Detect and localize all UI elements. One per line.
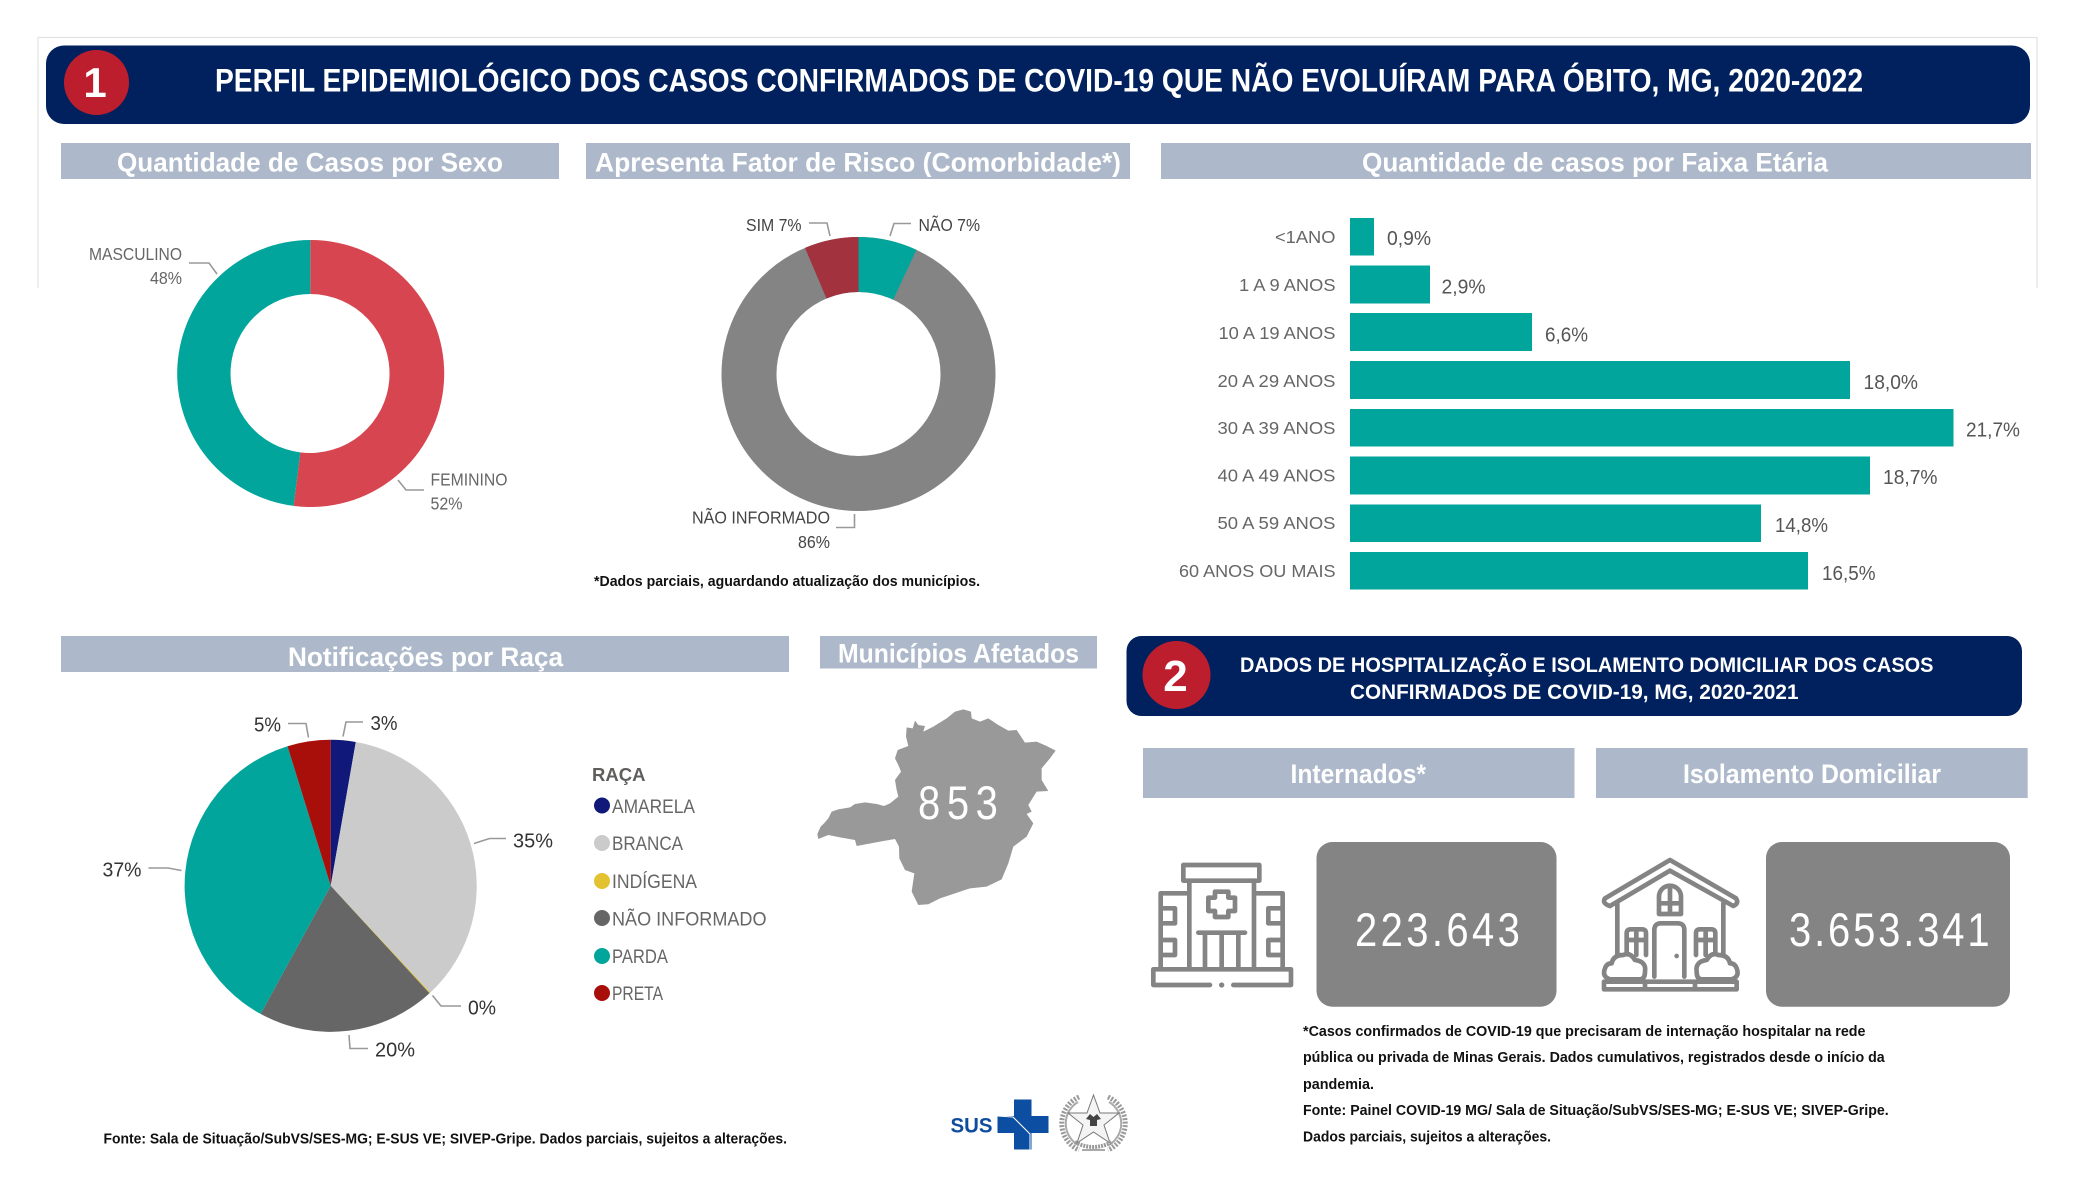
heading: isolamento	[1596, 748, 2028, 798]
label: 37%: 37%	[102, 860, 142, 882]
bar: 50 a 59 anos	[1218, 504, 1828, 542]
panel: internados	[1143, 748, 1574, 1007]
label: sim: SIM 7%	[746, 215, 802, 235]
heading: isolamento: Isolamento Domiciliar	[1683, 759, 1941, 789]
label: 20%: 20%	[375, 1040, 415, 1062]
heading: internados: Internados*	[1290, 759, 1426, 789]
badge: number 2	[1142, 641, 1210, 709]
footnote: internação e fonte: pandemia.	[1303, 1077, 1374, 1093]
bar: 40 a 49 anos: 18,7%	[1883, 467, 1938, 489]
subtitle text: CONFIRMADOS DE COVID-19, MG, 2020-2021	[1350, 680, 1799, 704]
bar: 20 a 29 anos: 18,0%	[1864, 372, 1918, 394]
bar: 40 a 49 anos	[1218, 456, 1938, 494]
label: sim	[746, 215, 830, 236]
label: masculino: 48%	[150, 268, 182, 288]
bar: 1 a 9 anos	[1239, 266, 1486, 304]
icon: house	[1604, 860, 1738, 989]
stat card: 3.653.341: 3.653.341	[1789, 905, 1990, 957]
heading: faixa etária	[1161, 143, 2031, 179]
bar: 20 a 29 anos	[1218, 361, 1918, 399]
label: masculino	[89, 244, 217, 288]
legend: raça: NÃO INFORMADO	[612, 908, 766, 930]
legend: raça: BRANCA	[612, 834, 683, 855]
bar: 1 a 9 anos: 2,9%	[1442, 276, 1486, 298]
heading: comorbidade: Apresenta Fator de Risco (Comorbidade*)	[595, 148, 1121, 178]
badge: number 2: 2	[1163, 652, 1188, 701]
label: 35%: 35%	[513, 830, 553, 852]
bar chart: faixa etária	[1179, 218, 2020, 590]
bar: 60 anos ou mais: 60 ANOS OU MAIS	[1179, 561, 1336, 581]
label: não: NÃO 7%	[918, 214, 980, 235]
footnote: internação e fonte: pública ou privada de Minas Gerais. Dados cumulativos, registrados desde o início da	[1303, 1050, 1886, 1066]
title text: PERFIL EPIDEMIOLÓGICO DOS CASOS CONFIRMADOS DE COVID-19 QUE NÃO EVOLUÍRAM PARA ÓBITO, MG, 2020-2022	[215, 62, 1863, 98]
label: não informado: 86%	[798, 532, 830, 552]
bar: 30 a 39 anos	[1218, 409, 2020, 446]
legend: raça: AMARELA	[612, 797, 695, 818]
heading: internados	[1143, 748, 1574, 798]
stat card: 223.643: 223.643	[1355, 905, 1520, 957]
logo: SUS	[950, 1100, 1048, 1150]
bar: 20 a 29 anos: 20 A 29 ANOS	[1218, 371, 1336, 391]
legend: raça: RAÇA	[592, 764, 645, 785]
panel: age bands	[1161, 143, 2031, 590]
heading: sexo: Quantidade de Casos por Sexo	[117, 148, 503, 178]
footnote: dados parciais: *Dados parciais, aguardando atualização dos municípios.	[594, 574, 980, 590]
bar: 50 a 59 anos: 50 A 59 ANOS	[1218, 513, 1336, 533]
label: 3%: 3%	[370, 713, 398, 735]
heading: sexo	[61, 143, 559, 179]
legend: raça: PARDA	[612, 947, 668, 968]
heading: municípios: Municípios Afetados	[838, 638, 1079, 668]
bar: 60 anos ou mais: 16,5%	[1822, 563, 1876, 585]
bar: 10 a 19 anos: 10 A 19 ANOS	[1218, 323, 1336, 343]
banner 1: main title	[46, 46, 2030, 124]
bar: 10 a 19 anos	[1218, 313, 1588, 351]
panel: affected municipalities	[817, 636, 1097, 905]
bar: 50 a 59 anos: 14,8%	[1775, 515, 1828, 537]
label: feminino: 52%	[430, 494, 462, 514]
bar: 30 a 39 anos: 21,7%	[1966, 420, 2020, 442]
bar: 60 anos ou mais	[1179, 552, 1876, 590]
heading: faixa etária: Quantidade de casos por Faixa Etária	[1362, 148, 1829, 178]
label: masculino: MASCULINO	[89, 244, 182, 264]
heading: raça	[61, 636, 789, 672]
label: não informado: NÃO INFORMADO	[692, 506, 830, 528]
source note: left: Fonte: Sala de Situação/SubVS/SES-MG; E-SUS VE; SIVEP-Gripe. Dados parciais, sujeitos a alterações.	[104, 1132, 787, 1148]
bar: 1 a 9 anos: 1 A 9 ANOS	[1239, 275, 1336, 295]
panel: comorbidity	[586, 143, 1130, 590]
logo: brasão de Minas Gerais	[1062, 1095, 1125, 1150]
bar: 30 a 39 anos: 30 A 39 ANOS	[1218, 418, 1336, 438]
bar: 10 a 19 anos: 6,6%	[1545, 324, 1588, 346]
donut chart: comorbidade	[749, 237, 968, 484]
label: não informado	[692, 506, 854, 552]
label: feminino: FEMININO	[430, 470, 508, 490]
subtitle text: DADOS DE HOSPITALIZAÇÃO E ISOLAMENTO DOMICILIAR DOS CASOS	[1240, 652, 1934, 677]
heading: raça: Notificações por Raça	[288, 642, 564, 672]
label: 5%: 5%	[254, 714, 281, 736]
footnote: internação e fonte: *Casos confirmados de COVID-19 que precisaram de internação hospitalar na rede	[1303, 1024, 1866, 1040]
stat card: 3.653.341	[1766, 842, 2010, 1007]
label: 0%	[432, 996, 496, 1020]
number: 853: 853	[918, 778, 998, 830]
bar: menor de 1 ano	[1275, 218, 1431, 256]
map: Minas Gerais	[817, 709, 1056, 905]
pie chart: raça	[185, 740, 477, 1032]
legend: raça	[592, 764, 766, 1005]
footnote: internação e fonte	[1303, 1024, 1889, 1146]
legend: raça: PRETA	[612, 984, 663, 1005]
label: 5%	[254, 714, 308, 738]
logo: SUS: SUS	[950, 1114, 992, 1138]
label: 35%	[474, 830, 553, 852]
label: não	[890, 214, 980, 236]
panel: isolamento domiciliar	[1596, 748, 2028, 1007]
footnote: internação e fonte: Dados parciais, sujeitos a alterações.	[1303, 1130, 1551, 1146]
badge: number 1: 1	[83, 59, 107, 106]
subtitle text	[1240, 652, 1934, 704]
label: 3%	[343, 713, 398, 736]
legend: raça: INDÍGENA	[612, 872, 697, 893]
label: feminino	[398, 470, 508, 514]
footnote: internação e fonte: Fonte: Painel COVID-19 MG/ Sala de Situação/SubVS/SES-MG; E-SUS VE; SIVEP-Gripe.	[1303, 1103, 1889, 1119]
bar: menor de 1 ano: 0,9%	[1387, 228, 1431, 250]
bar: 40 a 49 anos: 40 A 49 ANOS	[1218, 466, 1336, 486]
banner 2: hospitalisation title	[1126, 636, 2022, 716]
donut chart: sexo	[177, 240, 444, 507]
label: 20%	[349, 1035, 415, 1062]
label: 0%: 0%	[468, 998, 496, 1020]
icon: hospital	[1153, 865, 1291, 988]
badge: number 1	[64, 50, 129, 115]
bar: menor de 1 ano: <1ANO	[1275, 227, 1336, 247]
panel: notifications by race	[61, 636, 789, 1062]
panel: cases by sex	[61, 143, 559, 514]
label: 37%	[102, 860, 182, 882]
stat card: 223.643	[1316, 842, 1556, 1007]
